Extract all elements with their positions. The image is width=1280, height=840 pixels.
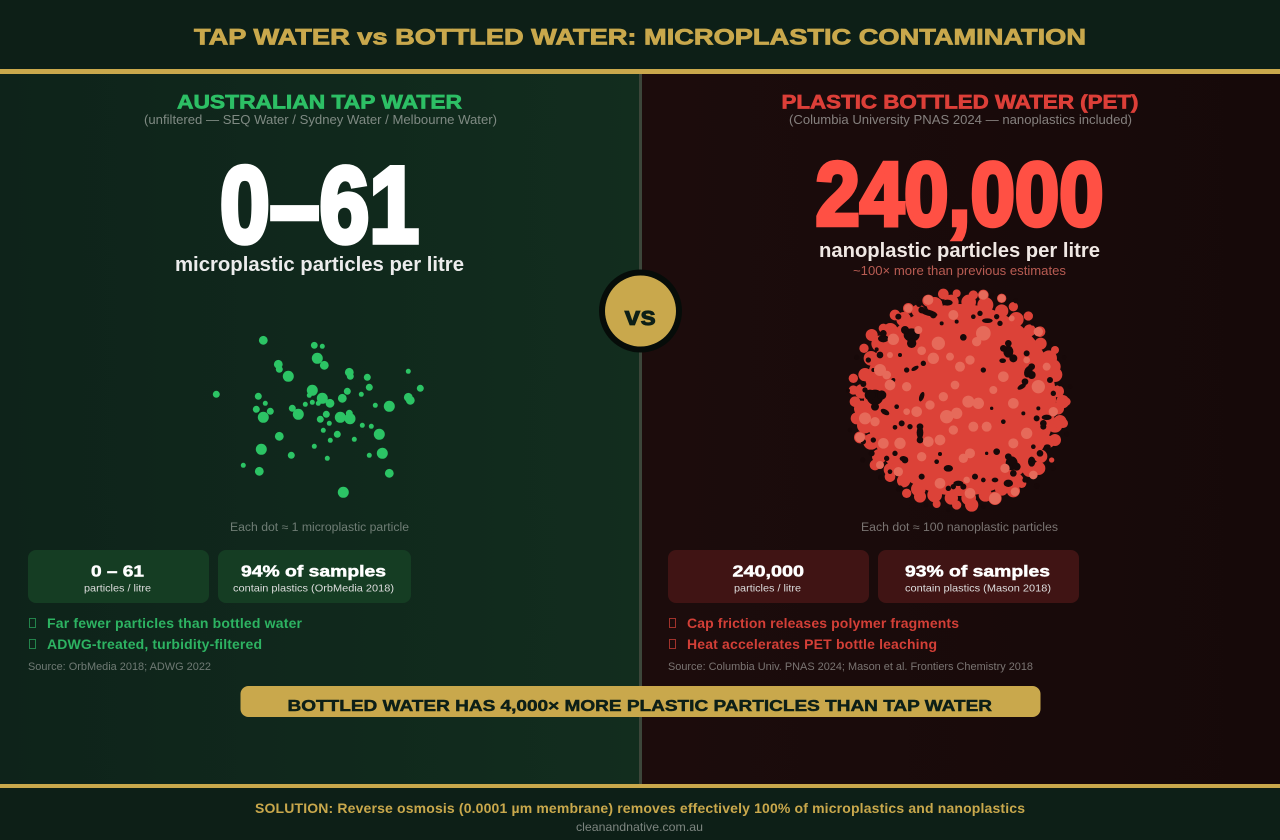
caption: dot scale tap: Each dot ≈ 1 microplastic particle [230, 522, 409, 534]
source: tap water: Source: OrbMedia 2018; ADWG 2022 [28, 661, 211, 673]
heading: plastic bottled water: PLASTIC BOTTLED WATER (PET) [782, 92, 1138, 114]
website: cleanandnative.com.au [576, 820, 703, 834]
caption: dot scale bottled: Each dot ≈ 100 nanoplastic particles [861, 522, 1058, 534]
solution statement: SOLUTION: Reverse osmosis (0.0001 µm membrane) removes effectively 100% of microplastics and nanoplastics [255, 800, 1025, 816]
stat card: 93% of samples: 93% of samples [905, 564, 1050, 580]
source: bottled water: Source: Columbia Univ. PNAS 2024; Mason et al. Frontiers Chemistry 2018 [668, 661, 1033, 673]
bullet: heat accelerates leaching: Heat accelerates PET bottle leaching [687, 636, 937, 652]
footer [0, 784, 1280, 840]
stat card: 93% of samples: contain plastics (Mason 2018) [905, 582, 1051, 594]
unit label: nanoplastic particles per litre: nanoplastic particles per litre [819, 240, 1100, 262]
stat card: 93% of samples [878, 550, 1079, 603]
header band [0, 0, 1280, 69]
lighter overlapping particles [855, 290, 1058, 504]
stat card: 94% of samples: 94% of samples [241, 564, 386, 580]
stat card: 94% of samples: contain plastics (OrbMedia 2018) [233, 582, 394, 594]
stat card: 240,000 particles: 240,000 [732, 564, 804, 580]
stat card: 240,000 particles: particles / litre [734, 582, 801, 594]
note: 100x more than previous estimates: ~100× more than previous estimates [853, 264, 1066, 278]
banner: 4,000x more particles [240, 686, 1040, 717]
heading: Australian tap water: AUSTRALIAN TAP WATER [177, 92, 462, 114]
gaps between particles [846, 289, 1072, 512]
dot field: dense nanoplastic particles [846, 289, 1072, 512]
dot field: sparse microplastic particles [213, 336, 424, 498]
big number: 0–61: 0–61 [220, 144, 419, 265]
big number: 240,000: 240,000 [816, 145, 1104, 245]
panel: bottled water [640, 74, 1280, 784]
subheading: tap water sources: (unfiltered — SEQ Water / Sydney Water / Melbourne Water) [144, 113, 497, 127]
panel: tap water [0, 74, 640, 784]
unit label: microplastic particles per litre: microplastic particles per litre [175, 254, 464, 276]
title: TAP WATER vs BOTTLED WATER: MICROPLASTIC CONTAMINATION [194, 24, 1086, 50]
stat card: 0–61 particles [28, 550, 209, 603]
stat card: 0–61 particles: particles / litre [84, 582, 151, 594]
bullet: ADWG-treated: ADWG-treated, turbidity-filtered [47, 636, 262, 652]
bullet: far fewer particles: Far fewer particles than bottled water [47, 615, 303, 631]
subheading: bottled water source: (Columbia University PNAS 2024 — nanoplastics included) [789, 113, 1132, 127]
vs badge [599, 270, 682, 352]
stat card: 94% of samples [218, 550, 411, 603]
banner: 4,000x more particles: BOTTLED WATER HAS 4,000× MORE PLASTIC PARTICLES THAN TAP WATER [288, 698, 993, 715]
stat card: 240,000 particles [668, 550, 869, 603]
bullet: cap friction: Cap friction releases polymer fragments [687, 615, 959, 631]
stat card: 0–61 particles: 0 – 61 [91, 564, 144, 580]
vs badge: vs [624, 301, 656, 331]
